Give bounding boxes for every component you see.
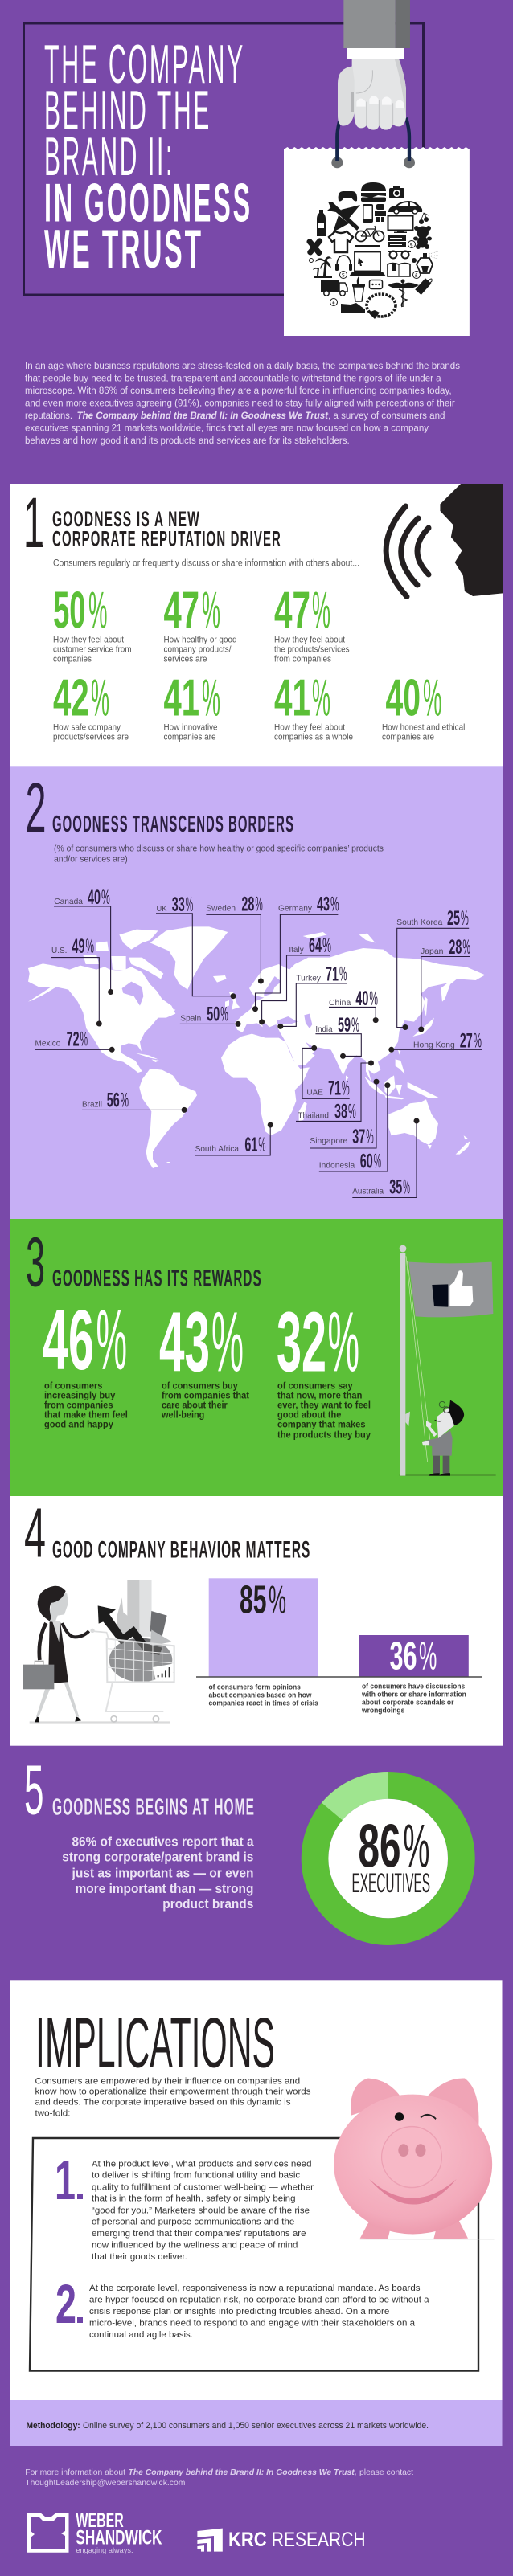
bar caption 85%: companies react in times of crisis bbox=[209, 1699, 318, 1707]
stat 40%: % bbox=[423, 669, 442, 727]
callout: Australia 35%: 35 bbox=[389, 1176, 402, 1198]
icon: open book bbox=[388, 263, 410, 276]
point 1: quality to fulfillment of customer well-being — whether bbox=[92, 2182, 314, 2192]
icon: pound coin: £ bbox=[415, 273, 418, 278]
callout: Germany 43% bbox=[252, 893, 339, 1012]
section number 4: 4 bbox=[24, 1494, 46, 1572]
stat 47% products: from companies bbox=[274, 654, 331, 664]
logo: KRC Research bbox=[197, 2529, 366, 2552]
callout: Hong Kong 27% bbox=[388, 1030, 482, 1053]
title bbox=[44, 35, 252, 280]
subheading: (% of consumers who discuss or share how healthy or good specific companies’ products bbox=[54, 844, 384, 853]
point 1: emerging trend that their companies’ reputations are bbox=[92, 2229, 306, 2239]
point 2: 2 bbox=[55, 2273, 76, 2335]
bar value 36%: 36 bbox=[389, 1634, 417, 1678]
panel: 4 good company behavior matters bbox=[10, 1494, 503, 1746]
point 1 bbox=[55, 2149, 314, 2262]
icon: stacked box bbox=[388, 235, 406, 247]
stat 43%: 43 bbox=[159, 1295, 210, 1390]
callout: South Africa 61%: % bbox=[258, 1135, 266, 1156]
callout: U.S. 49% bbox=[51, 936, 102, 1027]
text block: strong corporate/parent brand is bbox=[62, 1850, 253, 1865]
callout: South Africa 61% bbox=[195, 1122, 273, 1156]
point 2 bbox=[55, 2273, 429, 2340]
heading: GOODNESS TRANSCENDS BORDERS bbox=[52, 812, 294, 837]
icon: laptop bbox=[349, 252, 386, 276]
stat 50% bbox=[53, 581, 132, 664]
intro paragraph bbox=[35, 2076, 311, 2118]
icon: small circle bbox=[309, 259, 314, 262]
callout: Brazil 56% bbox=[82, 1090, 187, 1113]
map: Americas and Greenland bbox=[28, 926, 228, 1168]
stat 32%: of consumers say bbox=[277, 1380, 353, 1391]
callout: Italy 64% bbox=[259, 935, 331, 1024]
panel: 2 goodness transcends borders: % bbox=[255, 893, 263, 916]
panel: 2 goodness transcends borders: % bbox=[342, 1078, 350, 1099]
infographic canvas: IN GOODNESS bbox=[44, 174, 252, 233]
title: BRAND II: bbox=[44, 127, 174, 187]
stat 46% bbox=[43, 1293, 128, 1429]
heading: GOODNESS HAS ITS REWARDS bbox=[52, 1266, 262, 1292]
stat 41% whole: How they feel about bbox=[274, 723, 345, 733]
callout: U.S. 49%: U.S. bbox=[51, 946, 67, 955]
callout: South Korea 25% bbox=[396, 908, 469, 1030]
point 1: to deliver is shifting from functional utility and basic bbox=[92, 2171, 301, 2181]
icon: camera bbox=[389, 186, 404, 198]
panel: 2 goodness transcends borders: % bbox=[461, 908, 469, 930]
panel: 3 goodness has its rewards: 3 bbox=[26, 1224, 45, 1302]
icon: t-shirt bbox=[329, 231, 353, 252]
callout: Hong Kong 27%: Hong Kong bbox=[413, 1040, 455, 1049]
callout: Italy 64%: 64 bbox=[309, 935, 322, 957]
stat 47% healthy: 47 bbox=[164, 581, 199, 640]
intro text block bbox=[25, 360, 460, 446]
icon: euro coin: € bbox=[410, 243, 413, 247]
callout: Thailand 38%: 38 bbox=[334, 1101, 347, 1122]
section number 1: 1 bbox=[23, 483, 44, 562]
outlined box bbox=[30, 2138, 478, 2371]
infographic canvas: THE COMPANY bbox=[44, 35, 245, 95]
callout: Brazil 56%: % bbox=[121, 1090, 129, 1111]
stat 41% whole: 41 bbox=[274, 669, 310, 727]
icon: airplane bbox=[327, 202, 360, 232]
bar caption 36%: with others or share information bbox=[361, 1690, 466, 1699]
stat 47% healthy: How healthy or good bbox=[164, 635, 236, 644]
callout: UK 33%: 33 bbox=[172, 894, 185, 916]
stat 50%: % bbox=[88, 581, 108, 640]
icon: hand holding bag bbox=[331, 0, 415, 168]
stat 50%: How they feel about bbox=[53, 635, 124, 644]
icon: chat bubble bbox=[370, 280, 383, 289]
intro text block: , a survey of consumers and bbox=[328, 410, 445, 421]
callout: Spain 50%: 50 bbox=[207, 1004, 220, 1025]
stat 32%: ever, they want to feel bbox=[277, 1399, 371, 1410]
stat 43%: well-being bbox=[161, 1409, 204, 1420]
icon: robot bbox=[375, 204, 386, 222]
stat 47% products: 47 bbox=[274, 581, 310, 640]
callout: Turkey 71% bbox=[277, 964, 347, 1029]
panel: 3 goodness has its rewards bbox=[10, 1219, 503, 1496]
callout: South Africa 61%: South Africa bbox=[195, 1144, 239, 1154]
callout: India 59%: % bbox=[351, 1015, 359, 1037]
bar caption 85%: about companies based on how bbox=[209, 1691, 312, 1699]
icon: caduceus bbox=[388, 280, 419, 307]
callout: Canada 40%: % bbox=[101, 887, 110, 909]
callout: U.S. 49%: 49 bbox=[72, 936, 85, 958]
title frame bbox=[24, 23, 423, 295]
icon: bicycle bbox=[355, 226, 384, 241]
donut chart: 86% executives: % bbox=[403, 1812, 429, 1880]
stat 40%: companies are bbox=[382, 733, 434, 742]
callout: Mexico 72%: Mexico bbox=[35, 1038, 60, 1048]
callout: Australia 35%: % bbox=[403, 1176, 410, 1198]
icon: yen coin: ¥ bbox=[332, 301, 335, 305]
callout: Japan 28%: Japan bbox=[421, 947, 444, 956]
callout: Indonesia 60% bbox=[319, 1082, 390, 1173]
callout: India 59% bbox=[315, 1015, 361, 1059]
callout: India 59%: 59 bbox=[338, 1015, 351, 1037]
heading: GOODNESS BEGINS AT HOME bbox=[52, 1794, 255, 1820]
point 1: of personal and purpose communications and the bbox=[92, 2218, 294, 2227]
stat 46%: that make them feel bbox=[44, 1409, 128, 1420]
map: Eurasia, Africa and Oceania bbox=[221, 932, 485, 1155]
callout: Canada 40%: Canada bbox=[54, 897, 83, 906]
point 1: “good for you.” Marketers should be aware of the rise bbox=[92, 2206, 310, 2216]
callout: Germany 43%: Germany bbox=[278, 903, 313, 913]
callout: UAE 71%: 71 bbox=[328, 1078, 341, 1099]
stat 32%: that now, more than bbox=[277, 1389, 362, 1400]
stat 42%: products/services are bbox=[53, 733, 129, 742]
section number 5: 5 bbox=[24, 1752, 43, 1830]
callout: South Korea 25%: 25 bbox=[447, 908, 460, 930]
stat 43%: from companies that bbox=[162, 1389, 249, 1400]
logo: KRC Research: RESEARCH bbox=[272, 2529, 366, 2551]
callout: Thailand 38% bbox=[296, 1061, 374, 1122]
intro text block: The Company behind the Brand II: In Goodness We Trust bbox=[77, 410, 329, 421]
stat 42% bbox=[53, 669, 129, 742]
icon: man raising thumbs-up flag bbox=[400, 1245, 496, 1476]
panel: 2 goodness transcends borders bbox=[10, 766, 503, 1219]
stat 47% products: % bbox=[312, 581, 330, 640]
callout: Brazil 56%: Brazil bbox=[82, 1099, 102, 1109]
methodology band bbox=[10, 2400, 502, 2446]
bar caption 36%: of consumers have discussions bbox=[362, 1682, 465, 1691]
footer contact text: ThoughtLeadership@webershandwick.com bbox=[25, 2478, 186, 2488]
intro text block: and even more executives agreeing (91%), companies need to stay fully aligned with perceptions of their bbox=[25, 397, 455, 408]
stat 46%: from companies bbox=[44, 1399, 113, 1410]
panel: 2 goodness transcends borders: % bbox=[339, 964, 347, 985]
footer contact text: The Company behind the Brand II: In Goodness We Trust, bbox=[129, 2468, 357, 2477]
icon: pound coin bbox=[413, 272, 420, 278]
stat 47% products bbox=[274, 581, 350, 664]
callout: UK 33%: UK bbox=[156, 904, 167, 914]
callout: Spain 50%: Spain bbox=[180, 1013, 201, 1023]
stat 41% whole: companies as a whole bbox=[274, 733, 353, 742]
icon: game controller bbox=[339, 191, 357, 201]
callout: China 40%: China bbox=[329, 998, 351, 1008]
donut chart: 86% executives: 86 bbox=[359, 1812, 400, 1880]
section 5: goodness begins at home bbox=[24, 1752, 462, 1932]
icon: headphones bbox=[335, 256, 352, 271]
text block: just as important as — or even bbox=[72, 1867, 254, 1881]
icon: glasses bbox=[388, 251, 411, 259]
stat 32%: 32 bbox=[277, 1295, 326, 1390]
icon: cluster of product icons bbox=[306, 182, 438, 319]
text block: product brands bbox=[162, 1897, 253, 1912]
icon: bandage bbox=[306, 237, 323, 257]
stat 42%: % bbox=[91, 669, 109, 727]
point 1: At the product level, what products and services need bbox=[92, 2160, 312, 2169]
icon: dollar coin bbox=[339, 272, 347, 278]
callout: Turkey 71%: 71 bbox=[326, 964, 339, 985]
footer contact text: please contact bbox=[359, 2468, 413, 2477]
text block bbox=[62, 1835, 254, 1912]
icon: burger bbox=[361, 182, 386, 202]
callout: China 40%: % bbox=[369, 988, 378, 1010]
icon: car bbox=[388, 201, 422, 214]
bar chart: % bbox=[269, 1577, 286, 1621]
stat 41% innovative: How innovative bbox=[164, 723, 217, 733]
callout: Thailand 38%: % bbox=[348, 1101, 356, 1122]
footer contact text bbox=[25, 2468, 413, 2488]
icon: woman pushing shopping cart bbox=[23, 1580, 174, 1723]
heading: GOODNESS IS A NEW bbox=[52, 507, 200, 531]
point 1: 1 bbox=[55, 2149, 76, 2211]
callout: Mexico 72%: 72 bbox=[67, 1028, 80, 1051]
panel: 1 goodness is a new corporate reputation driver: % bbox=[202, 669, 220, 727]
intro text block: microscope. With 86% of consumers believing they are a powerful force in influencing companies today, bbox=[25, 385, 452, 396]
stat 32%: good about the bbox=[277, 1409, 342, 1420]
callout: South Africa 61%: 61 bbox=[244, 1135, 258, 1156]
logo: Weber Shandwick bbox=[27, 2509, 162, 2555]
intro text block: that people buy need to be trusted, transparent and accountable to withstand the rigors of life under a bbox=[25, 373, 441, 384]
icon: monitor bbox=[388, 215, 413, 233]
point 1: now influenced by the wellness and peace of mind bbox=[92, 2240, 298, 2250]
callout: Germany 43%: 43 bbox=[317, 893, 330, 916]
title: BEHIND THE bbox=[44, 80, 211, 141]
stat 32%: the products they buy bbox=[277, 1429, 371, 1440]
title: WE TRUST bbox=[44, 219, 203, 280]
callout: Indonesia 60%: 60 bbox=[360, 1151, 373, 1173]
stat 47% products: the products/services bbox=[274, 644, 350, 654]
callout: South Korea 25%: South Korea bbox=[396, 918, 442, 927]
stat 47% healthy bbox=[164, 581, 236, 664]
stat 47% healthy: services are bbox=[164, 654, 207, 664]
donut chart: 86% executives bbox=[315, 1772, 462, 1932]
stat 47% healthy: company products/ bbox=[164, 644, 232, 654]
stat 50%: companies bbox=[53, 654, 92, 664]
icon: truck bbox=[321, 280, 347, 296]
footer contact text: For more information about bbox=[25, 2468, 125, 2477]
callout: Canada 40% bbox=[54, 887, 113, 995]
panel: 2 goodness transcends borders: % bbox=[330, 893, 339, 916]
callout: Australia 35%: Australia bbox=[352, 1186, 384, 1196]
panel: 2 goodness transcends borders: % bbox=[462, 937, 470, 959]
panel: implications bbox=[10, 1980, 502, 2400]
icon: dollar coin: $ bbox=[342, 273, 345, 278]
intro paragraph: know how to operationalize their empowerment through their words bbox=[35, 2087, 311, 2097]
heading: CORPORATE REPUTATION DRIVER bbox=[52, 526, 281, 550]
stat 43%: care about their bbox=[162, 1399, 228, 1410]
callout: Italy 64%: Italy bbox=[289, 945, 304, 955]
callout: Singapore 37%: Singapore bbox=[310, 1136, 347, 1146]
point 2: continual and agile basis. bbox=[89, 2330, 193, 2340]
callout: Turkey 71%: Turkey bbox=[296, 974, 322, 983]
icon: piggy bank bbox=[334, 2078, 495, 2239]
bar caption 36%: about corporate scandals or bbox=[362, 1698, 454, 1707]
icon: price tag bbox=[415, 278, 432, 295]
stat 47% healthy: % bbox=[202, 581, 220, 640]
callout: Mexico 72% bbox=[35, 1028, 115, 1053]
stat 32%: % bbox=[328, 1295, 359, 1390]
subheading bbox=[54, 844, 384, 865]
bar caption 85%: of consumers form opinions bbox=[209, 1683, 301, 1691]
callout: UAE 71%: UAE bbox=[306, 1088, 323, 1098]
callout: Singapore 37% bbox=[310, 1079, 380, 1148]
world map bbox=[28, 926, 485, 1168]
icon: palm island bbox=[313, 256, 332, 278]
icon: phone bbox=[363, 204, 373, 223]
section number 1 bbox=[23, 483, 44, 562]
stat 40%: How honest and ethical bbox=[382, 723, 465, 733]
callout: Indonesia 60%: % bbox=[374, 1151, 381, 1173]
point 2: micro-level, brands need to respond to and engage with their stakeholders on a bbox=[89, 2319, 416, 2329]
logo: Weber Shandwick: SHANDWICK bbox=[76, 2527, 162, 2549]
icon: shopping bag bbox=[284, 147, 470, 336]
stat 41% whole bbox=[274, 669, 353, 742]
text block: more important than — strong bbox=[76, 1882, 253, 1896]
icon: pen bbox=[355, 245, 380, 247]
callout: UK 33%: % bbox=[186, 894, 193, 916]
callout: Australia 35% bbox=[352, 1118, 420, 1198]
callout: Sweden 28%: 28 bbox=[241, 893, 254, 916]
point 2: At the corporate level, responsiveness is now a reputational mandate. As boards bbox=[89, 2284, 421, 2293]
stat 50%: 50 bbox=[53, 581, 86, 640]
callout: Canada 40%: 40 bbox=[88, 887, 101, 909]
stat 42%: 42 bbox=[53, 669, 89, 727]
panel: 3 goodness has its rewards: % bbox=[96, 1293, 127, 1388]
callout: Indonesia 60%: Indonesia bbox=[319, 1160, 355, 1170]
stat 41% innovative: companies are bbox=[164, 733, 215, 742]
callout: U.S. 49%: % bbox=[85, 936, 94, 958]
callout: Sweden 28%: Sweden bbox=[206, 903, 236, 913]
stat 32% bbox=[277, 1295, 371, 1440]
panel: 1 goodness is a new corporate reputation driver bbox=[10, 483, 503, 767]
stat 46%: good and happy bbox=[44, 1418, 113, 1429]
callout: Italy 64%: % bbox=[322, 935, 331, 957]
point 2: crisis response plan or insights into predicting troubles ahead. On a more bbox=[89, 2307, 389, 2316]
logo: KRC Research: KRC bbox=[228, 2529, 267, 2551]
subheading: and/or services are) bbox=[54, 855, 128, 865]
stat 46%: 46 bbox=[43, 1293, 94, 1388]
stat 47% products: How they feel about bbox=[274, 635, 345, 644]
stat 46%: increasingly buy bbox=[44, 1389, 116, 1400]
bar caption 36% bbox=[361, 1682, 466, 1715]
callout: Thailand 38%: Thailand bbox=[298, 1110, 329, 1120]
bar caption 36%: wrongdoings bbox=[361, 1706, 404, 1715]
callout: China 40%: 40 bbox=[355, 988, 368, 1010]
intro paragraph: and deeds. The corporate imperative based on this dynamic is bbox=[35, 2098, 291, 2108]
stat 41% whole: % bbox=[312, 669, 330, 727]
icon: speaking head bbox=[386, 484, 503, 596]
methodology band: Methodology: bbox=[26, 2421, 80, 2431]
callout: Brazil 56%: 56 bbox=[107, 1090, 120, 1111]
callout: Hong Kong 27%: 27 bbox=[460, 1030, 473, 1052]
intro text block: In an age where business reputations are stress-tested on a daily basis, the companies behind the brands bbox=[25, 360, 460, 371]
point 1: that their goods deliver. bbox=[92, 2252, 187, 2262]
callout: Sweden 28% bbox=[206, 893, 264, 983]
logo: Weber Shandwick: WEBER bbox=[76, 2509, 124, 2532]
callout: Mexico 72%: % bbox=[80, 1028, 88, 1051]
bar value 36%: % bbox=[419, 1634, 437, 1678]
icon: yen coin bbox=[330, 299, 338, 305]
icon: euro coin bbox=[408, 241, 415, 247]
point 1: that is in the form of health, safety or simply being bbox=[92, 2194, 296, 2204]
stat 43%: of consumers buy bbox=[162, 1380, 238, 1391]
callout: UAE 71% bbox=[302, 1045, 350, 1099]
icon: perfume bbox=[412, 251, 438, 273]
icon: chain bracelet bbox=[367, 294, 396, 319]
bar chart bbox=[196, 1577, 482, 1715]
callout: UK 33% bbox=[156, 894, 236, 999]
bar caption 85% bbox=[209, 1683, 318, 1707]
intro paragraph: Consumers are empowered by their influence on companies and bbox=[35, 2076, 300, 2086]
bar value 85%: 85 bbox=[240, 1577, 267, 1621]
icon: shoe bbox=[341, 303, 365, 313]
methodology band: Online survey of 2,100 consumers and 1,050 senior executives across 21 markets worldwide. bbox=[83, 2421, 429, 2431]
stat 41% innovative: 41 bbox=[164, 669, 199, 727]
stat 42%: How safe company bbox=[53, 723, 121, 733]
callout: China 40% bbox=[329, 988, 379, 1023]
stat 40% bbox=[382, 669, 465, 742]
icon: cherries bbox=[419, 213, 429, 224]
icon: coffee cup bbox=[352, 276, 365, 301]
panel: 2 goodness transcends borders: % bbox=[474, 1030, 482, 1052]
logo: Weber Shandwick: engaging always. bbox=[76, 2546, 133, 2555]
heading bbox=[52, 507, 281, 550]
icon: teddy bear bbox=[413, 226, 432, 249]
point 2: are hyper-focused on reputation risk, no corporate brand can afford to be without a bbox=[89, 2295, 429, 2304]
callout: Spain 50%: % bbox=[220, 1004, 228, 1025]
stat 40%: 40 bbox=[386, 669, 421, 727]
stat 46%: of consumers bbox=[44, 1380, 103, 1391]
text block: 86% of executives report that a bbox=[72, 1835, 254, 1850]
intro text block: behaves and how good it and its products and services are for its stakeholders. bbox=[25, 435, 350, 446]
callout: Japan 28% bbox=[418, 937, 470, 1032]
callout: India 59%: India bbox=[315, 1024, 333, 1034]
intro paragraph: two-fold: bbox=[35, 2108, 71, 2118]
section number 2: 2 bbox=[26, 768, 47, 847]
callout: Singapore 37%: % bbox=[366, 1126, 374, 1148]
subheading: Consumers regularly or frequently discuss or share information with others about... bbox=[53, 559, 359, 569]
callout: Singapore 37%: 37 bbox=[352, 1126, 365, 1148]
intro text block: reputations. bbox=[25, 410, 72, 421]
callout: Japan 28%: 28 bbox=[449, 937, 462, 959]
stat 50%: customer service from bbox=[53, 644, 132, 654]
stat 43%: % bbox=[211, 1295, 244, 1390]
intro text block: executives spanning 21 markets worldwide, finds that all eyes are now focused on how a company bbox=[25, 423, 429, 434]
callout: Spain 50% bbox=[180, 1004, 241, 1027]
icon: water bottle bbox=[317, 210, 326, 236]
stat 32%: company that makes bbox=[277, 1418, 366, 1429]
